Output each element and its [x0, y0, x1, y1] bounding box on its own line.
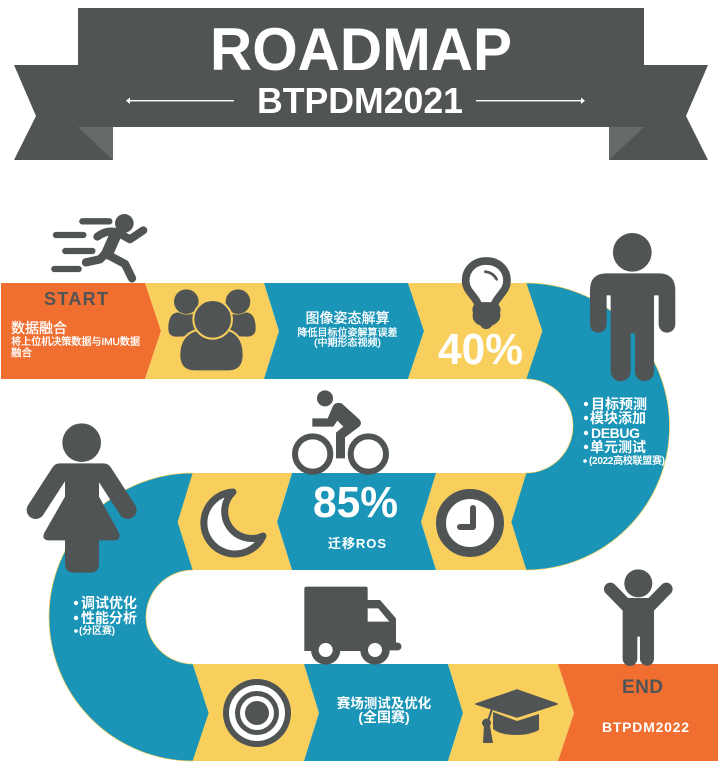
icon: woman	[36, 423, 128, 573]
image pose heading: 图像姿态解算	[306, 310, 390, 326]
item: debug: DEBUG	[591, 425, 640, 441]
segment: field test	[304, 664, 463, 761]
title: ROADMAP	[210, 16, 512, 83]
end heading: END	[622, 677, 663, 698]
end label: BTPDM2022	[602, 719, 689, 735]
bullet dots	[583, 402, 588, 463]
segment: bulb	[408, 283, 542, 379]
text: start	[11, 289, 140, 359]
item: performance: 性能分析	[81, 610, 137, 626]
icon: light bulb	[466, 261, 507, 329]
text: image pose	[298, 310, 398, 349]
icon: man	[590, 233, 675, 381]
item: regional: (分区赛)	[79, 624, 115, 637]
icon: target	[223, 679, 291, 747]
icon: clock	[441, 494, 499, 552]
item: unit test: 单元测试	[590, 439, 646, 455]
arrow: right	[476, 98, 585, 104]
banner right tail	[609, 65, 708, 160]
item: tuning: 调试优化	[81, 595, 137, 611]
banner	[14, 8, 708, 160]
segment: image pose	[264, 283, 424, 379]
data fusion detail: 将上位机决策数据与IMU数据	[11, 335, 140, 348]
icon: bicycle	[295, 390, 386, 472]
arrow: left	[126, 98, 234, 104]
subtitle: BTPDM2021	[257, 80, 463, 121]
banner main ribbon	[78, 8, 644, 127]
banner left tail	[14, 65, 113, 160]
icon: runner	[54, 214, 143, 278]
image pose detail: 降低目标位姿解算误差	[298, 326, 398, 339]
segment: migrate	[277, 473, 436, 570]
segment: cap	[448, 664, 574, 761]
icon: moon	[204, 492, 263, 554]
start heading: START	[44, 289, 108, 309]
segment: right curve	[511, 283, 670, 570]
segment: end	[558, 664, 718, 761]
item: module: 模块添加	[590, 410, 646, 426]
icon: person arms raised	[610, 569, 666, 666]
banner right fold	[609, 127, 644, 160]
list: left	[74, 595, 137, 637]
item: league: (2022高校联盟赛)	[589, 454, 665, 467]
bullet dots	[74, 601, 78, 633]
segment: start	[1, 283, 161, 379]
list: right	[583, 396, 665, 467]
stat: 40 percent: 40%	[438, 325, 523, 374]
text: end	[602, 677, 689, 735]
segment: clock	[421, 473, 526, 570]
banner left fold	[78, 127, 113, 160]
text: migrate ROS: 迁移ROS	[328, 536, 386, 551]
national stage: (全国赛)	[358, 709, 410, 725]
data fusion detail continued: 融合	[11, 346, 32, 359]
icon: graduation cap	[476, 690, 557, 743]
road	[1, 283, 718, 761]
text: field test	[337, 695, 432, 725]
segment: group	[145, 283, 279, 379]
item: target prediction: 目标预测	[591, 396, 647, 412]
segment: target	[193, 664, 319, 761]
segment: left curve	[49, 473, 209, 761]
stat: 85 percent: 85%	[313, 478, 398, 527]
segment: moon	[178, 473, 292, 570]
icon: truck	[304, 587, 401, 665]
icon: people group	[168, 289, 256, 371]
image pose stage: (中期形态视频)	[314, 336, 381, 349]
data fusion heading: 数据融合	[11, 320, 67, 336]
field test heading: 赛场测试及优化	[337, 695, 432, 711]
